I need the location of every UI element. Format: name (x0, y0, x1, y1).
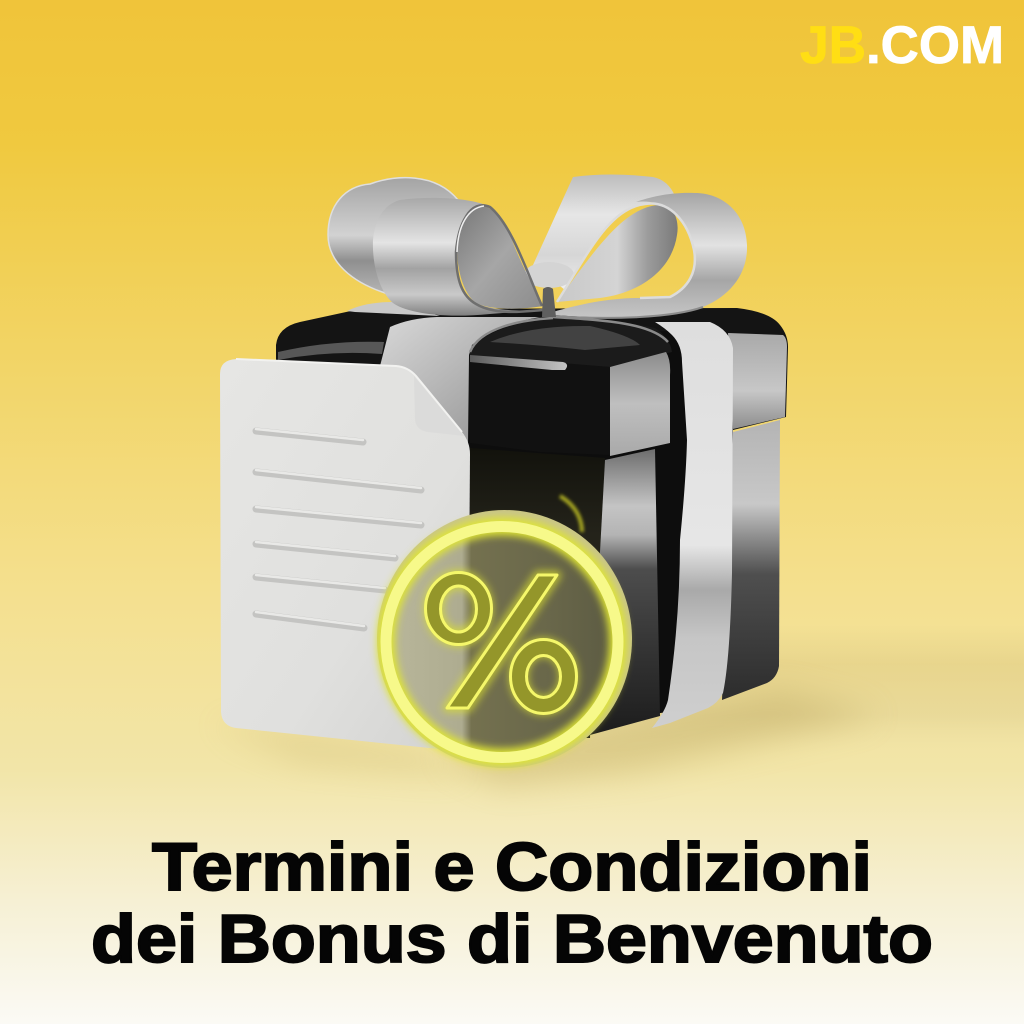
floor shadow (210, 625, 1024, 785)
box lid base (276, 308, 788, 460)
right loop band (553, 193, 747, 318)
neon ring (386, 526, 618, 758)
lid gloss highlight (470, 355, 567, 370)
lid right side (728, 333, 787, 429)
icon: neon percent coin (377, 510, 632, 768)
left ribbon band on lid (380, 317, 540, 445)
front left inner (457, 206, 543, 309)
front left rim (456, 205, 543, 312)
right loop inner (557, 205, 678, 302)
logo: JB.COM (800, 16, 1004, 75)
document text lines (256, 429, 421, 628)
title: Termini e Condizioni (152, 829, 872, 905)
icon: silver ribbon bow (328, 174, 747, 318)
lid front black (467, 355, 610, 455)
yellow reflection (560, 496, 582, 532)
title: dei Bonus di Benvenuto (91, 901, 933, 977)
back right band (533, 174, 675, 290)
gift box illustration (220, 174, 788, 768)
neon percent sign (426, 572, 576, 714)
lid top reflections (490, 326, 640, 350)
box glossy side strip (590, 449, 660, 735)
back left loop (328, 178, 458, 293)
right loop rim (557, 204, 695, 302)
logo: JB.COM: JB (800, 16, 866, 75)
logo: JB.COM: .COM (866, 16, 1004, 75)
vertical silver ribbon (652, 322, 733, 728)
icon: document page (220, 359, 470, 752)
bow central bulge (524, 262, 574, 288)
black backing behind the ribbon and lid (466, 330, 692, 738)
front left band (373, 198, 542, 316)
lid front right panel (610, 352, 670, 456)
document fold (414, 376, 464, 436)
box lower front (470, 448, 605, 738)
title (91, 829, 933, 977)
box lower right face (722, 420, 780, 700)
thin ribbon edges (470, 317, 668, 352)
lid left highlight (278, 342, 384, 360)
lid top surface (470, 318, 672, 367)
bow knot (542, 287, 556, 317)
